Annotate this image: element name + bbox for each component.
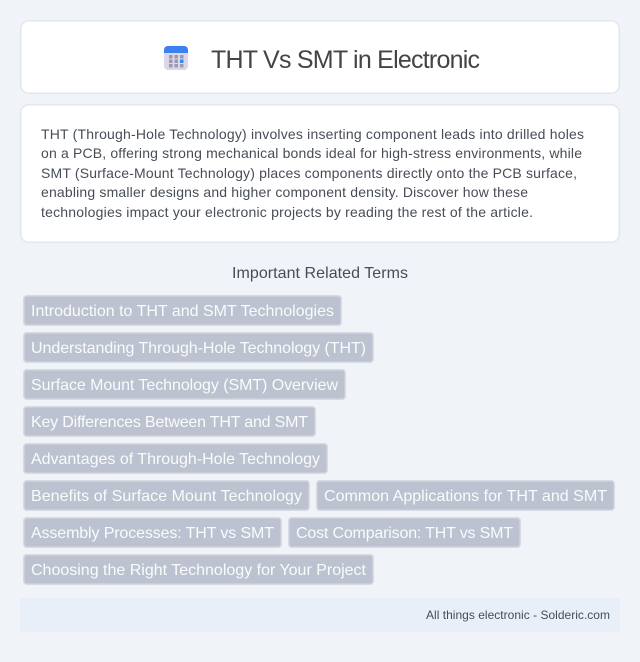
text block: description [41,126,584,220]
text block: description: enabling smaller designs and higher component density. Discover how these [41,184,528,200]
tag: cost comparison [289,518,520,547]
tag: advantages of THT: Advantages of Through-Hole Technology [31,451,320,468]
footer [20,598,620,632]
tag: advantages of THT [24,444,327,473]
tag list: related terms [24,296,614,584]
panel: title header [21,21,619,93]
tag: benefits of SMT [24,481,309,510]
tag: understanding THT: Understanding Through-Hole Technology (THT) [31,340,366,357]
tag: SMT overview: Surface Mount Technology (SMT) Overview [31,377,338,394]
tag: assembly processes: Assembly Processes: THT vs SMT [31,525,274,542]
tag: SMT overview [24,370,345,399]
tag: assembly processes [24,518,281,547]
tag: choosing technology [24,555,373,584]
panel: introduction text [21,105,619,242]
tag: key differences: Key Differences Between THT and SMT [31,414,308,431]
tag: introduction [24,296,341,325]
tag: benefits of SMT: Benefits of Surface Mount Technology [31,488,302,505]
heading: related terms: Important Related Terms [232,265,408,282]
text block: description: THT (Through-Hole Technology) involves inserting component leads into drilled holes [41,126,584,142]
tag: introduction: Introduction to THT and SMT Technologies [31,303,334,320]
tag: common applications: Common Applications for THT and SMT [324,488,607,505]
tag: key differences [24,407,315,436]
text block: description: on a PCB, offering strong mechanical bonds ideal for high-stress environments, while [41,145,582,161]
icon: calendar [164,46,188,70]
footer: All things electronic - Solderic.com [426,608,610,622]
tag: understanding THT [24,333,373,362]
tag: common applications [317,481,614,510]
tag: cost comparison: Cost Comparison: THT vs SMT [296,525,513,542]
title: THT Vs SMT in Electronic [211,46,480,74]
tag: choosing technology: Choosing the Right Technology for Your Project [31,562,367,579]
text block: description: SMT (Surface-Mount Technology) places components directly onto the PCB surface, [41,165,577,181]
text block: description: technologies impact your electronic projects by reading the rest of the article. [41,204,533,220]
